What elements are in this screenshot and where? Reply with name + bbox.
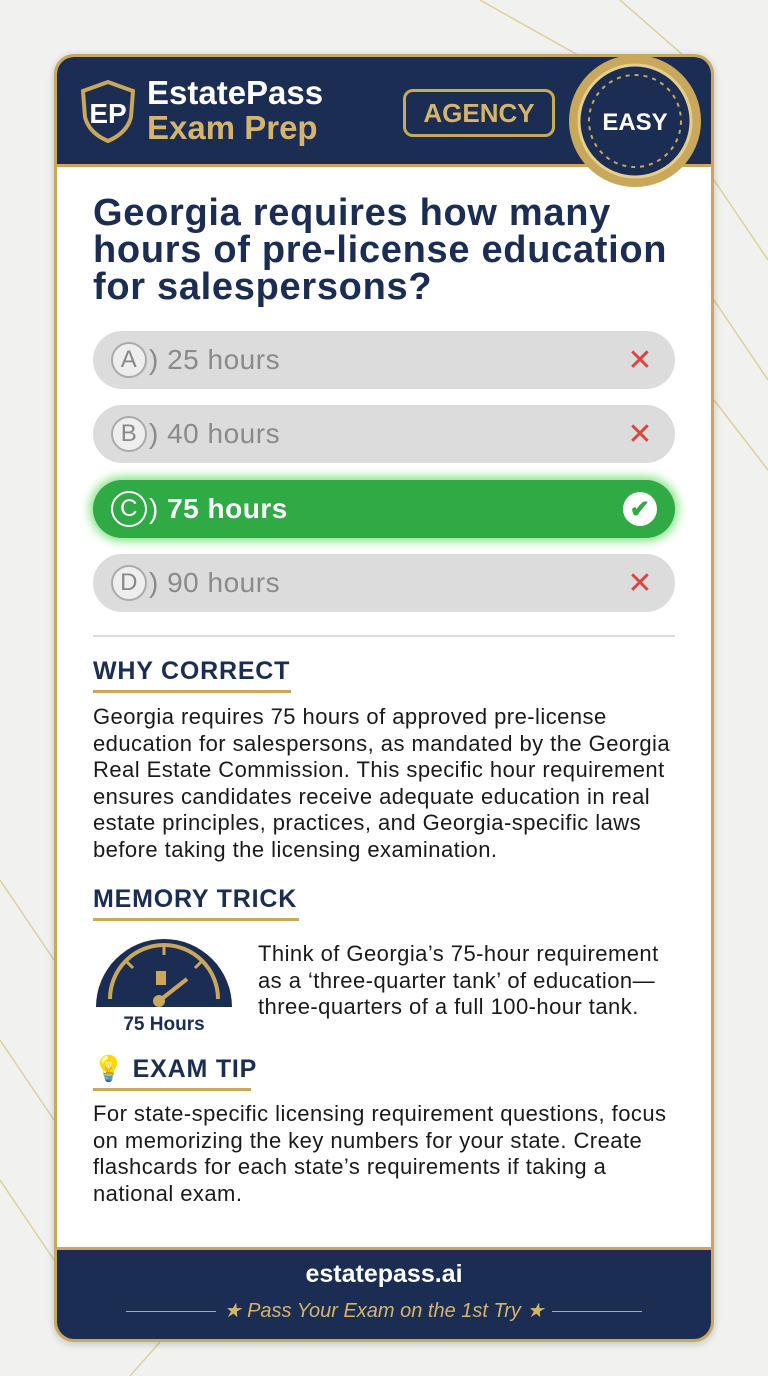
brand name: Exam Prep [147, 109, 318, 146]
heading: memory trick: MEMORY TRICK [93, 885, 297, 913]
why correct text [93, 704, 670, 862]
why correct text: before taking the licensing examination. [93, 836, 497, 862]
tagline: ★ Pass Your Exam on the 1st Try ★ [224, 1300, 544, 1322]
question: hours of pre-license education [93, 229, 667, 271]
header [57, 57, 711, 167]
exam tip text [93, 1101, 666, 1206]
option B: ) 40 hours [149, 418, 280, 449]
why correct text: estate principles, practices, and Georgia-specific laws [93, 810, 641, 835]
option A [93, 331, 675, 389]
footer [57, 1247, 711, 1339]
question [93, 192, 667, 308]
exam tip text: flashcards for each state’s requirements if taking a [93, 1154, 606, 1179]
option C correct: ) [149, 493, 159, 524]
question: for salespersons? [93, 266, 432, 308]
icon: gauge: 75 Hours [123, 1014, 205, 1035]
option C correct: C [120, 495, 138, 522]
exam tip text: For state-specific licensing requirement questions, focus [93, 1101, 666, 1126]
exam tip text: national exam. [93, 1180, 242, 1206]
option D [93, 554, 675, 612]
question: Georgia requires how many [93, 192, 611, 234]
heading: why correct: WHY CORRECT [93, 657, 290, 685]
footer url: estatepass.ai [305, 1260, 463, 1288]
logo shield [80, 80, 136, 143]
agency badge [403, 89, 555, 137]
memory trick text [258, 941, 659, 1019]
why correct text: Real Estate Commission. This specific hour requirement [93, 757, 665, 782]
memory trick text: three-quarters of a full 100-hour tank. [258, 994, 639, 1019]
brand name [147, 74, 323, 146]
icon: gauge [96, 939, 232, 1035]
why correct text: education for salespersons, as mandated by the Georgia [93, 730, 670, 756]
option D: D [120, 569, 138, 596]
option D: ✕ [627, 566, 653, 600]
memory trick text: Think of Georgia’s 75-hour requirement [258, 941, 659, 966]
why correct text: ensures candidates receive adequate education in real [93, 784, 650, 808]
option A: ✕ [627, 344, 653, 376]
option C correct: ✔ [630, 496, 650, 522]
easy seal [569, 57, 701, 187]
logo shield: EP [89, 98, 127, 129]
brand name: EstatePass [147, 74, 323, 111]
heading: exam tip: 💡 EXAM TIP [93, 1055, 257, 1083]
option A: A [121, 346, 137, 373]
agency badge: AGENCY [423, 98, 535, 128]
exam tip text: on memorizing the key numbers for your state. Create [93, 1128, 642, 1152]
option D: ) 90 hours [149, 567, 280, 598]
option B [93, 405, 675, 463]
memory trick text: as a ‘three-quarter tank’ of education— [258, 968, 655, 992]
option A: ) 25 hours [149, 344, 280, 375]
easy seal: EASY [602, 109, 668, 136]
why correct text: Georgia requires 75 hours of approved pre-license [93, 704, 607, 729]
option B: ✕ [627, 418, 653, 450]
option B: B [121, 420, 137, 447]
option C correct [93, 480, 675, 538]
option C correct: 75 hours [167, 493, 288, 524]
